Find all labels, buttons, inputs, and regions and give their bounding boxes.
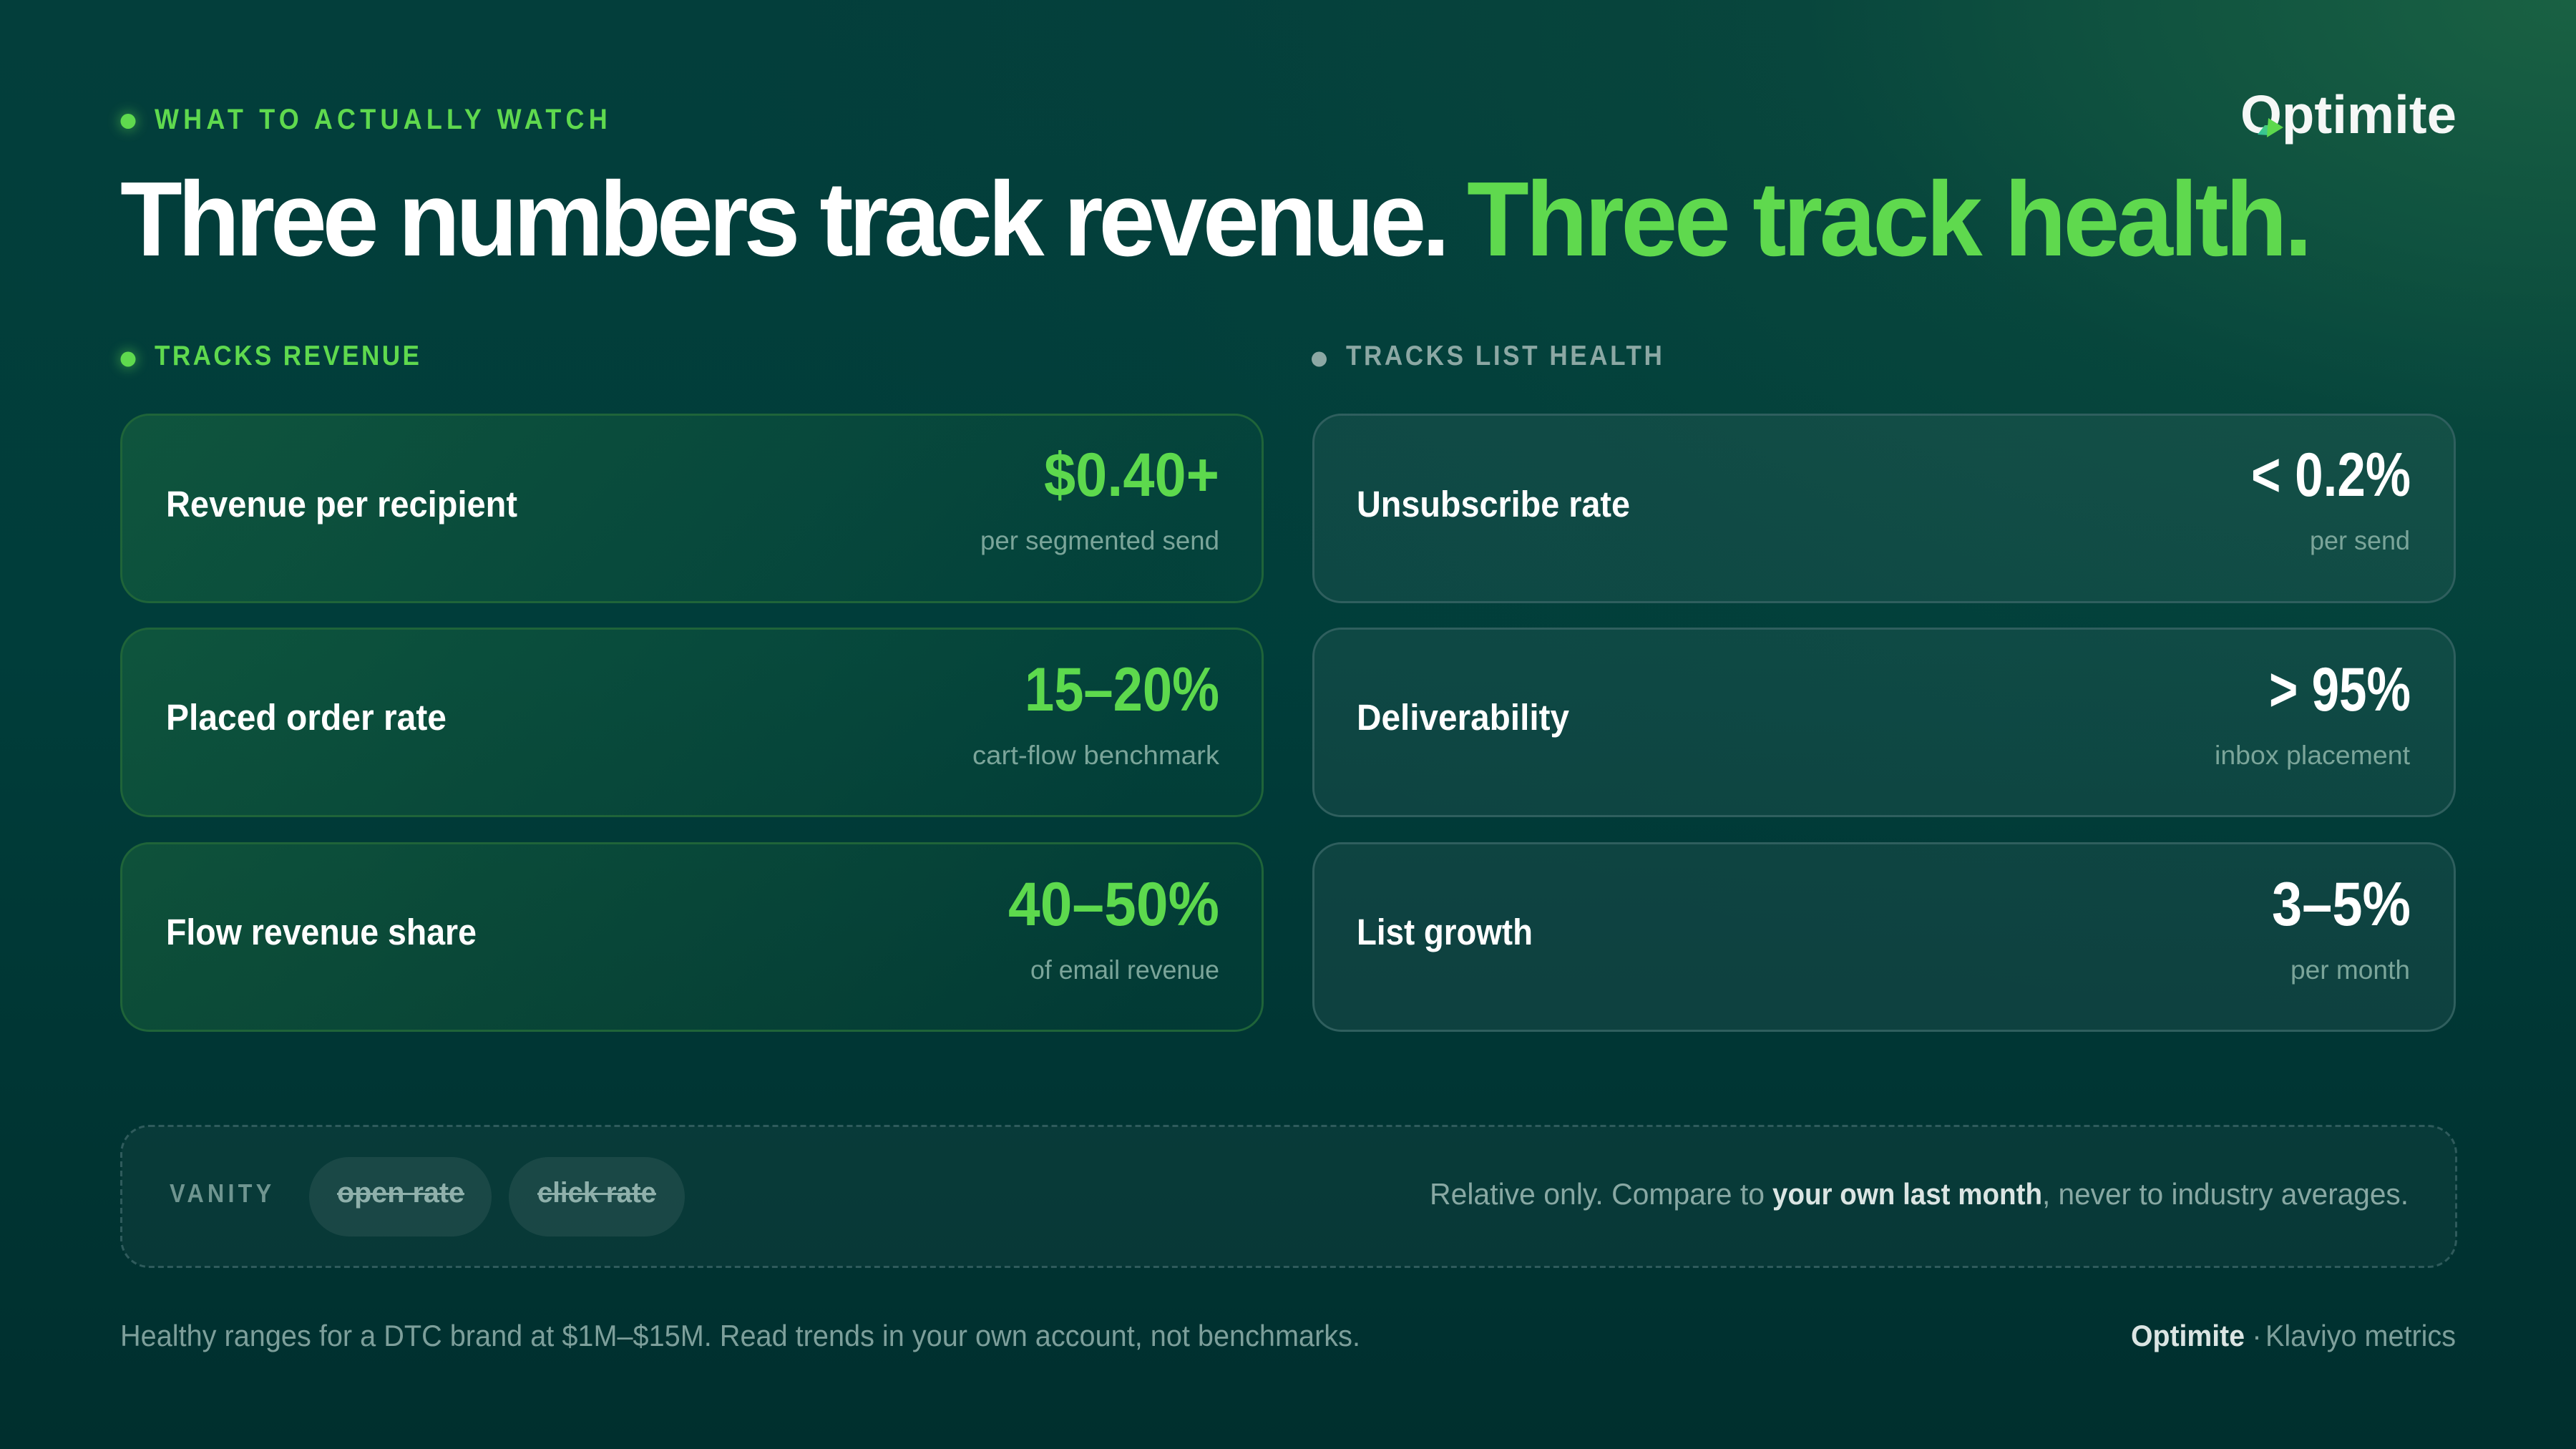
panel: placed order rate: 15–20%	[1025, 655, 1219, 724]
vanity note	[1430, 1177, 2409, 1211]
eyebrow: what to actually watch: WHAT TO ACTUALLY WATCH	[155, 104, 608, 135]
panel: revenue per recipient: $0.40+	[1044, 441, 1219, 509]
panel: vanity metrics strip	[122, 1126, 2456, 1267]
column heading: tracks list health: TRACKS LIST HEALTH	[1346, 339, 1662, 371]
panel: flow revenue share: Flow revenue share	[166, 912, 477, 952]
pill: click rate: click rate	[537, 1177, 656, 1209]
panel: revenue per recipient: per segmented send	[980, 526, 1219, 555]
vanity note: your own last month	[1772, 1177, 2042, 1211]
vanity note: , never to industry averages.	[2042, 1177, 2409, 1211]
footer credit: ·	[2252, 1319, 2262, 1352]
panel: revenue per recipient	[122, 415, 1262, 602]
footer credit: Klaviyo metrics	[2265, 1319, 2456, 1352]
panel: revenue per recipient: Revenue per recipient	[166, 484, 517, 525]
footer credit	[2131, 1319, 2456, 1352]
panel: placed order rate: Placed order rate	[166, 697, 447, 738]
panel: flow revenue share: 40–50%	[1008, 870, 1219, 939]
title: Three track health.	[1467, 160, 2313, 278]
panel: list growth: per month	[2290, 955, 2410, 985]
panel: deliverability: > 95%	[2269, 655, 2411, 724]
panel: flow revenue share	[122, 843, 1262, 1030]
footer note: Healthy ranges for a DTC brand at $1M–$15M. Read trends in your own account, not benchmarks.	[120, 1319, 1360, 1352]
panel: unsubscribe rate	[1314, 415, 2454, 602]
panel: unsubscribe rate: Unsubscribe rate	[1357, 484, 1630, 525]
panel: placed order rate: cart-flow benchmark	[972, 741, 1220, 770]
panel: unsubscribe rate: per send	[2310, 526, 2410, 555]
panel: unsubscribe rate: < 0.2%	[2251, 441, 2411, 509]
title	[120, 160, 2313, 278]
pill: open rate	[309, 1157, 492, 1236]
logo: Optimite: Optimite	[2240, 84, 2457, 145]
panel: deliverability	[1314, 628, 2454, 816]
title: Three numbers track revenue.	[120, 160, 1450, 278]
column heading: tracks revenue: TRACKS REVENUE	[155, 339, 419, 371]
panel: placed order rate	[122, 628, 1262, 816]
panel: list growth: 3–5%	[2272, 870, 2411, 939]
panel: list growth: List growth	[1357, 912, 1533, 952]
pill: click rate	[509, 1157, 685, 1236]
panel: flow revenue share: of email revenue	[1030, 955, 1219, 985]
panel: deliverability: inbox placement	[2215, 741, 2411, 770]
footer credit: Optimite	[2131, 1319, 2245, 1352]
panel: deliverability: Deliverability	[1357, 697, 1570, 738]
vanity note: Relative only. Compare to	[1430, 1177, 1765, 1211]
panel: list growth	[1314, 843, 2454, 1030]
pill: open rate: open rate	[337, 1177, 464, 1209]
vanity label: VANITY	[170, 1179, 271, 1208]
